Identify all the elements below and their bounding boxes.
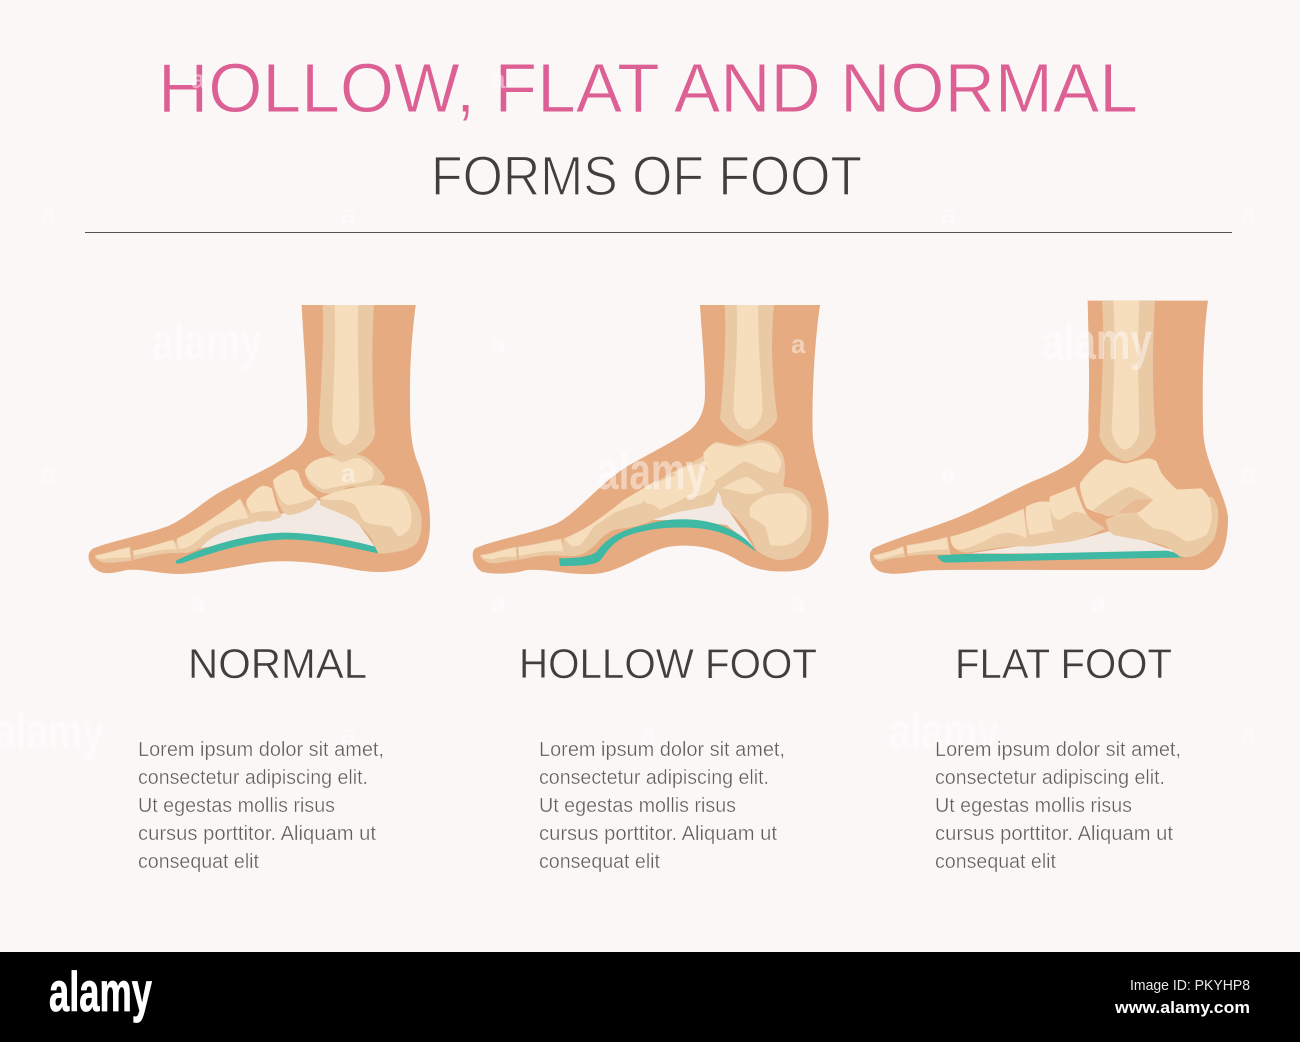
text block: flat foot: Ut egestas mollis risus (935, 794, 1132, 817)
text block: normal: Lorem ipsum dolor sit amet, (138, 738, 384, 761)
text block: flat foot: consequat elit (935, 850, 1056, 873)
footer logo: alamy (49, 960, 152, 1023)
title: HOLLOW, FLAT AND NORMAL (158, 49, 1138, 127)
footer url: www.alamy.com (1114, 998, 1250, 1017)
label: normal: NORMAL (188, 640, 367, 687)
watermark overlay: a (1241, 458, 1256, 488)
text block: hollow foot: consectetur adipiscing elit. (539, 766, 769, 789)
watermark overlay: alamy (889, 703, 999, 761)
subtitle: FORMS OF FOOT (431, 144, 862, 207)
watermark overlay: a (191, 64, 206, 94)
watermark overlay: a (1241, 719, 1256, 749)
footer image id: Image ID: PKYHP8 (1130, 977, 1250, 994)
text block: normal: Ut egestas mollis risus (138, 794, 335, 817)
text block: normal: consequat elit (138, 850, 259, 873)
watermark overlay: a (341, 458, 356, 488)
text block: hollow foot: Lorem ipsum dolor sit amet, (539, 738, 785, 761)
text block: flat foot: Lorem ipsum dolor sit amet, (935, 738, 1181, 761)
watermark overlay: alamy (152, 313, 262, 371)
text block: flat foot: consectetur adipiscing elit. (935, 766, 1165, 789)
watermark overlay: a (341, 719, 356, 749)
watermark overlay: a (941, 458, 956, 488)
text block: hollow foot: cursus porttitor. Aliquam ut (539, 822, 777, 845)
watermark overlay: a (191, 588, 206, 618)
text block: hollow foot (539, 738, 785, 873)
watermark overlay: a (341, 199, 356, 229)
watermark overlay: a (491, 64, 506, 94)
watermark overlay: alamy (1042, 313, 1152, 371)
text block: flat foot: cursus porttitor. Aliquam ut (935, 822, 1173, 845)
text block: normal (138, 738, 384, 873)
text block: hollow foot: consequat elit (539, 850, 660, 873)
watermark overlay: a (491, 588, 506, 618)
label: flat foot: FLAT FOOT (955, 640, 1172, 687)
watermark overlay: a (1241, 199, 1256, 229)
foot illustration: normal (89, 305, 430, 574)
watermark overlay (0, 64, 1256, 761)
watermark overlay: a (641, 719, 656, 749)
text block: flat foot (935, 738, 1181, 873)
footer bar (0, 952, 1300, 1042)
watermark overlay: alamy (597, 443, 707, 501)
text block: normal: consectetur adipiscing elit. (138, 766, 368, 789)
foot illustration: hollow foot (473, 305, 829, 574)
foot illustration: flat foot (870, 301, 1228, 574)
watermark overlay: a (941, 199, 956, 229)
watermark overlay: a (41, 458, 56, 488)
label: hollow foot: HOLLOW FOOT (519, 640, 817, 687)
watermark overlay: a (1091, 588, 1106, 618)
watermark overlay: a (791, 588, 806, 618)
watermark overlay: a (491, 329, 506, 359)
watermark overlay: a (41, 199, 56, 229)
text block: hollow foot: Ut egestas mollis risus (539, 794, 736, 817)
text block: normal: cursus porttitor. Aliquam ut (138, 822, 376, 845)
watermark overlay: a (791, 329, 806, 359)
